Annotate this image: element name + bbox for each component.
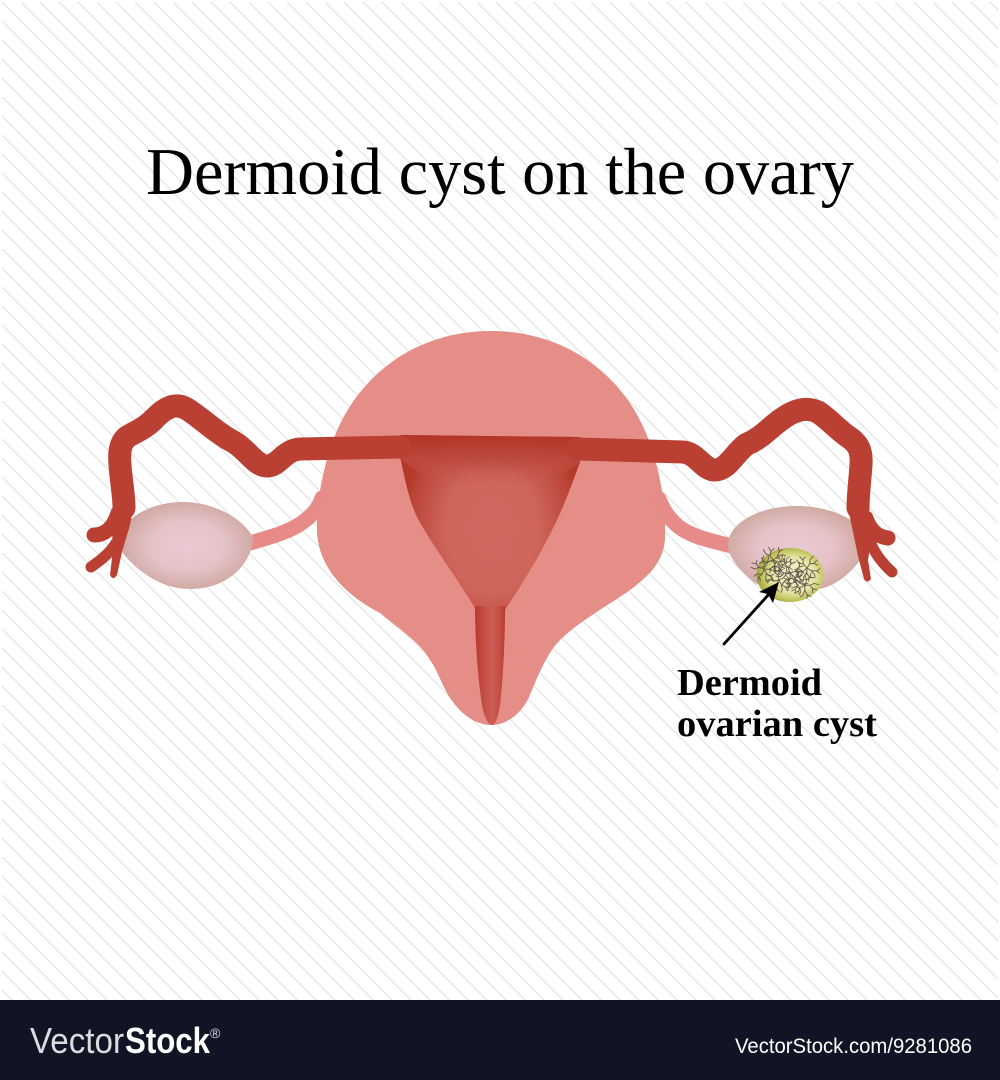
fimbriae right: [866, 518, 888, 538]
arrow head: [759, 582, 779, 603]
footer background: [0, 1000, 1000, 1080]
cyst body: [756, 548, 824, 602]
left fallopian tube: [91, 406, 400, 578]
fimbriae left: [94, 513, 118, 535]
footer bar: [0, 1000, 1000, 1080]
cyst hair: [746, 547, 823, 603]
main tube left: [120, 406, 400, 508]
arrow shaft: [724, 593, 770, 644]
arrow: [724, 582, 779, 644]
cervical canal: [475, 606, 505, 725]
uterine cavity: [400, 435, 580, 613]
uterus body: [317, 331, 665, 725]
label line 2: ovarian cyst: [677, 703, 877, 745]
right fallopian tube: [578, 409, 892, 582]
right ligament: [659, 499, 732, 546]
uterus diagram: [91, 331, 892, 725]
VectorStock logo: ®: [210, 1025, 221, 1041]
VectorStock logo: Stock: [125, 1020, 211, 1061]
title: Dermoid cyst on the ovary: [146, 136, 854, 209]
main tube right: [578, 409, 861, 508]
cyst label: [677, 662, 877, 745]
VectorStock logo: [30, 1020, 221, 1061]
left ovary: [122, 502, 253, 589]
image reference: VectorStock.com/9281086: [735, 1035, 972, 1058]
VectorStock logo: Vector: [30, 1020, 124, 1061]
right ovary: [728, 506, 863, 591]
cavity top band: [400, 435, 580, 486]
dermoid cyst: [746, 547, 824, 603]
label line 1: Dermoid: [677, 662, 822, 704]
left ligament: [250, 498, 322, 543]
